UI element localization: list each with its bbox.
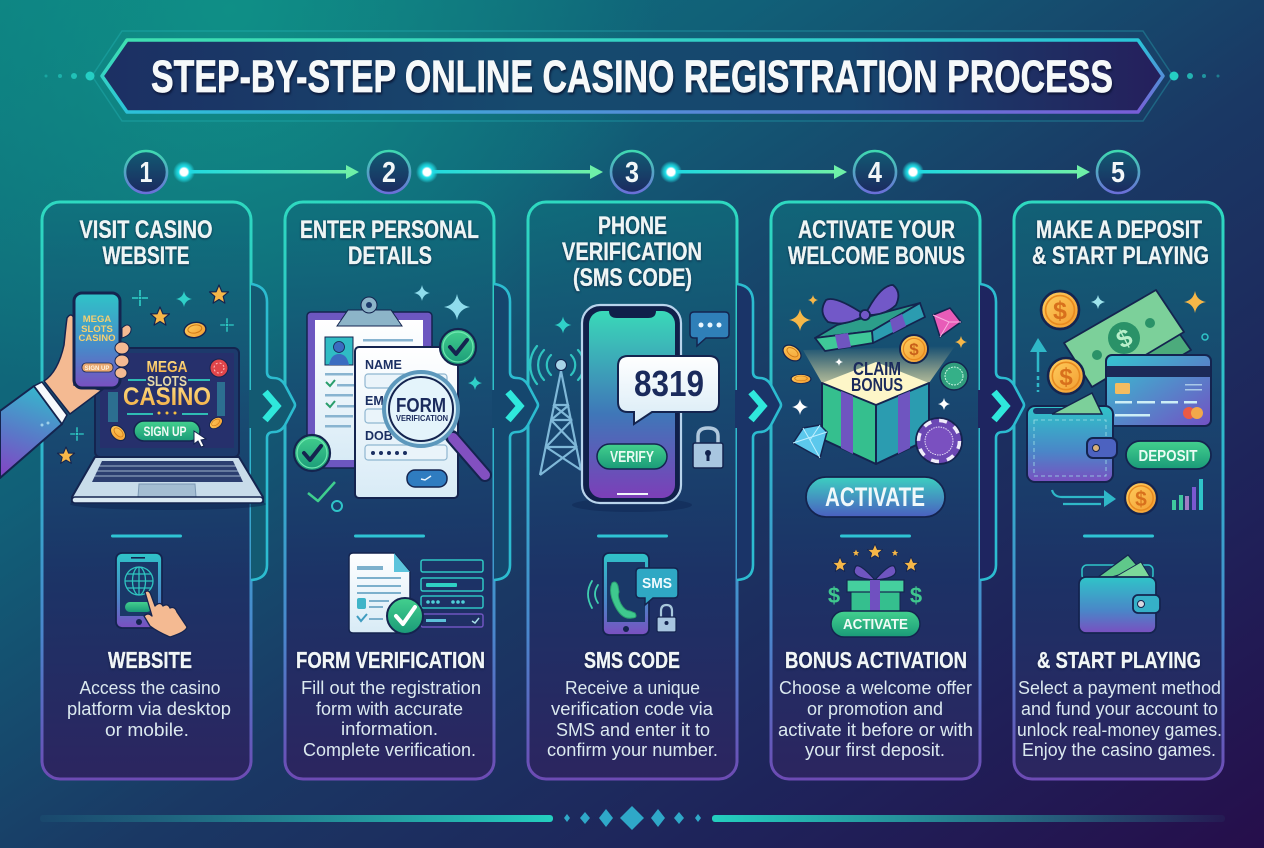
icon: document with check and fields [349, 553, 483, 634]
step number 3: 3 [625, 157, 639, 189]
illustration: laptop and phone in hand [0, 285, 266, 510]
form sheet [355, 347, 458, 498]
laptop: SLOTS [147, 373, 187, 390]
subheading: SMS CODE [584, 647, 680, 673]
step number 5 [1097, 151, 1139, 193]
panel: step 5 [1014, 202, 1223, 779]
icon: gift with activate button: $ [828, 583, 840, 608]
description: Fill out the registration [301, 678, 481, 698]
description: Complete verification. [303, 740, 476, 760]
coins [1041, 291, 1157, 514]
heading: & START PLAYING [1032, 242, 1209, 270]
laptop: SIGN UP [144, 424, 186, 439]
claim bonus text: CLAIM [853, 359, 901, 379]
padlock [693, 428, 723, 468]
light rays [803, 346, 955, 400]
banknotes [1064, 290, 1191, 387]
description: platform via desktop [67, 699, 231, 719]
description [1017, 678, 1222, 760]
green chip [940, 362, 968, 390]
heading: PHONE [598, 212, 667, 240]
icon: gift with activate button: $ [910, 583, 922, 608]
banknotes: $ [1112, 323, 1137, 355]
magnifier: VERIFICATION [396, 413, 448, 423]
banner dots left [44, 72, 94, 80]
illustration: deposit [1027, 290, 1211, 514]
heading: WELCOME BONUS [788, 242, 965, 270]
sparkle [554, 316, 572, 334]
form sheet: NAME [365, 358, 402, 372]
step number 5: 5 [1111, 157, 1125, 189]
step number 1: 1 [140, 157, 152, 189]
bow [822, 285, 898, 323]
heading: ACTIVATE YOUR [798, 216, 955, 244]
description [778, 678, 973, 760]
laptop: CASINO [123, 383, 211, 411]
heading: VERIFICATION [562, 238, 702, 266]
panel: step 3 [528, 202, 737, 779]
claim bonus text: BONUS [851, 375, 903, 395]
magnifier [384, 372, 485, 475]
coins: $ [1059, 364, 1073, 391]
divider [1083, 534, 1154, 538]
step number 1 [125, 151, 167, 193]
heading [562, 212, 702, 292]
icon: phone with globe and tap [116, 553, 187, 637]
heading: VISIT CASINO [80, 216, 212, 244]
panel: step 2 [285, 202, 494, 779]
sleeve and hand [0, 315, 102, 478]
clipboard [307, 297, 432, 468]
right arrow [1052, 490, 1116, 507]
blue diamond [793, 425, 827, 458]
magnifier: FORM [396, 395, 446, 417]
connector chevron 1 [249, 284, 295, 580]
step number 2 [368, 151, 410, 193]
title banner [44, 31, 1220, 121]
divider [840, 534, 911, 538]
heading: DETAILS [348, 242, 432, 270]
connector chevron 4 [978, 284, 1024, 580]
subheading: WEBSITE [108, 647, 192, 673]
chat bubble [690, 312, 729, 346]
step number 2: 2 [382, 157, 396, 189]
phone: CASINO [79, 333, 115, 344]
heading: ENTER PERSONAL [300, 216, 479, 244]
description: Enjoy the casino games. [1022, 740, 1216, 760]
heading: MAKE A DEPOSIT [1036, 216, 1202, 244]
laptop: MEGA [146, 359, 188, 376]
heading [300, 216, 479, 270]
subheading: & START PLAYING [1037, 647, 1201, 673]
step number 4: 4 [868, 157, 882, 189]
description [547, 678, 718, 760]
description: SMS and enter it to [556, 720, 710, 740]
arrow 3 to 4 [660, 161, 847, 183]
description: your first deposit. [805, 740, 945, 760]
description: unlock real-money games. [1017, 720, 1222, 740]
deposit button [1126, 441, 1211, 469]
smartphone: VERIFY [610, 449, 654, 466]
cell tower [530, 346, 584, 475]
connector chevron 2 [492, 284, 538, 580]
description: confirm your number. [547, 740, 718, 760]
illustration: registration form [294, 285, 485, 511]
step number 3 [611, 151, 653, 193]
description: or promotion and [807, 699, 943, 719]
description: or mobile. [105, 720, 189, 740]
arrow 2 to 3 [416, 161, 603, 183]
credit card [1106, 355, 1211, 426]
description: information. [341, 719, 438, 739]
coins: $ [1053, 297, 1067, 325]
box [822, 362, 929, 464]
phone [74, 293, 131, 388]
illustration: phone verification [530, 305, 729, 512]
mini bar chart [1172, 479, 1203, 510]
icon: phone with sms and lock: SMS [642, 575, 672, 592]
coins: $ [909, 340, 919, 359]
up arrow [1030, 338, 1047, 392]
heading [1032, 216, 1209, 270]
connector chevron 3 [735, 284, 781, 580]
panel: step 4 [771, 202, 980, 779]
description: and fund your account to [1021, 699, 1218, 719]
divider [354, 534, 425, 538]
sparkles and marks [308, 285, 482, 511]
description: verification code via [551, 699, 714, 719]
sparkles [70, 290, 234, 441]
heading [788, 216, 965, 270]
heading: WEBSITE [102, 242, 190, 270]
divider [597, 534, 668, 538]
phone: MEGA [83, 314, 111, 325]
code bubble [618, 356, 719, 424]
phone: SIGN UP [85, 366, 109, 372]
check badges [294, 329, 476, 471]
sparkles [789, 295, 967, 415]
arrow 1 to 2 [173, 161, 359, 183]
activate button [806, 477, 945, 517]
sparkles [1091, 291, 1208, 340]
claim bonus text [851, 359, 903, 395]
subheading: FORM VERIFICATION [296, 647, 485, 673]
icon: phone with sms and lock [588, 553, 678, 635]
stars and coin [57, 285, 229, 463]
icon: wallet with cash [1079, 555, 1160, 633]
description: Receive a unique [565, 678, 700, 698]
laptop [70, 348, 266, 510]
coins: $ [1135, 488, 1147, 511]
lid [815, 303, 925, 351]
code bubble: 8319 [634, 363, 704, 404]
deposit button: DEPOSIT [1138, 448, 1198, 465]
phone: SLOTS [81, 324, 113, 335]
form sheet: DOB [365, 429, 393, 443]
divider [111, 534, 182, 538]
description: Select a payment method [1018, 678, 1221, 698]
description: activate it before or with [778, 720, 973, 740]
coins [780, 335, 928, 384]
heading: (SMS CODE) [573, 264, 692, 292]
icon: gift with activate button: ACTIVATE [843, 616, 908, 633]
banner dots right [1170, 72, 1220, 80]
description: Choose a welcome offer [779, 678, 972, 698]
icon: gift with activate button [828, 544, 922, 637]
subheading: BONUS ACTIVATION [785, 647, 967, 673]
description [301, 678, 481, 760]
panel: step 1 [42, 202, 251, 779]
illustration: gift box [780, 285, 968, 517]
purple chip [916, 418, 962, 464]
arrow 4 to 5 [902, 161, 1090, 183]
activate button: ACTIVATE [825, 482, 925, 512]
description: form with accurate [316, 699, 463, 719]
wallet [1027, 393, 1117, 482]
heading [80, 216, 212, 270]
description [67, 678, 231, 740]
step number 4 [854, 151, 896, 193]
description: Access the casino [80, 678, 220, 698]
pink gem [933, 308, 961, 337]
smartphone [572, 305, 692, 512]
form sheet: EMAIL [365, 394, 404, 408]
step timeline [125, 151, 1139, 193]
bottom ornament [40, 806, 1225, 830]
